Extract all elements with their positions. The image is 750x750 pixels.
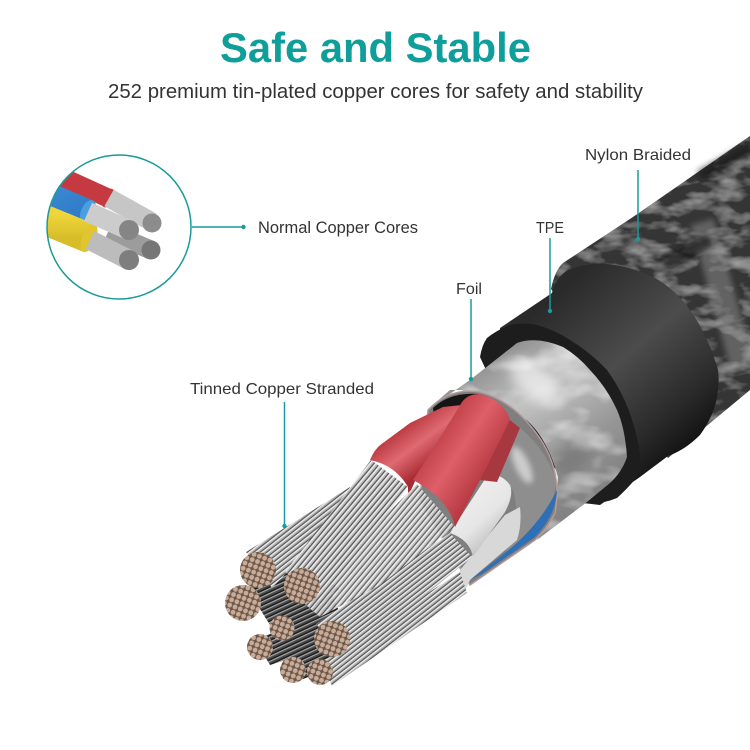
bundle: red rear strands xyxy=(285,460,408,600)
callout: nylon braided xyxy=(585,147,691,241)
subtitle: 252 premium tin-plated copper cores for safety and stability xyxy=(108,80,644,103)
bundle: upper left strands xyxy=(246,487,352,588)
icon: four-core wire illustration xyxy=(48,172,162,270)
callout: TPE xyxy=(536,220,564,313)
dark gap inside foil xyxy=(433,394,478,430)
main cable cross-section illustration xyxy=(225,136,750,686)
panel: normal copper cores inset xyxy=(30,155,191,299)
blue wire xyxy=(470,490,557,580)
bundle: dark rear strands xyxy=(248,555,350,680)
inner silver shield xyxy=(490,420,556,552)
nylon braided jacket xyxy=(551,136,750,458)
copper core ends xyxy=(225,552,350,685)
title: Safe and Stable xyxy=(220,24,531,71)
white wire upper xyxy=(450,475,511,557)
callout: TPE: TPE xyxy=(536,220,564,237)
red wire front xyxy=(413,394,510,527)
TPE inner sleeve xyxy=(500,264,719,505)
red wire sliver xyxy=(480,420,520,482)
callout: tinned copper stranded xyxy=(190,381,374,528)
TPE end ring xyxy=(480,324,640,503)
callout: foil: Foil xyxy=(456,281,482,298)
callout: nylon braided: Nylon Braided xyxy=(585,147,691,164)
callout: tinned copper stranded: Tinned Copper Stranded xyxy=(190,381,374,398)
foil opening interior xyxy=(420,391,557,585)
callout: normal copper cores: Normal Copper Cores xyxy=(258,219,418,237)
inset circle outline xyxy=(47,155,191,299)
foil shield xyxy=(427,340,627,540)
callout: foil xyxy=(456,281,482,381)
red wire rear xyxy=(370,405,462,497)
bundle: white wire lower strands xyxy=(322,572,467,686)
bundle: red front strands xyxy=(300,484,455,617)
shield highlight xyxy=(507,444,537,486)
white wire lower xyxy=(460,507,521,593)
bundle: white wire upper strands xyxy=(316,533,472,658)
